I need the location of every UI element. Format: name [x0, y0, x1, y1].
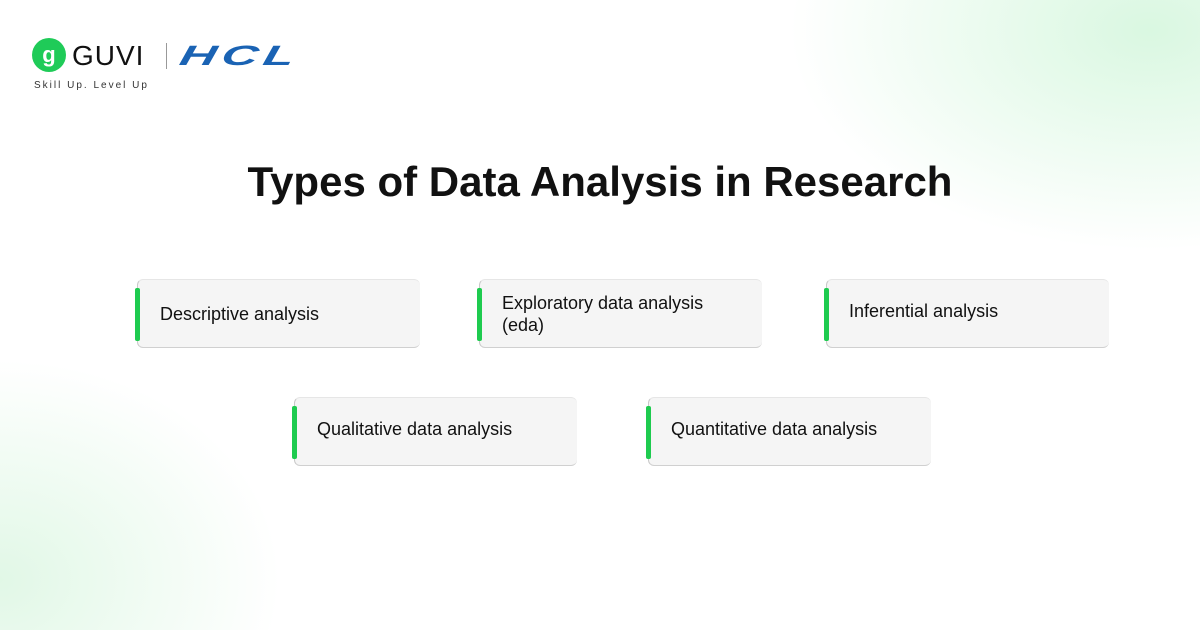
card: exploratory: (eda) [502, 314, 544, 334]
card: inferential: Inferential analysis [849, 300, 998, 320]
card: descriptive [137, 279, 420, 348]
card: qualitative: Qualitative data analysis [317, 418, 512, 438]
title: Types of Data Analysis in Research [248, 158, 952, 205]
card: quantitative: Quantitative data analysis [671, 418, 877, 438]
icon: guvi circle [32, 38, 66, 72]
tagline: Skill Up. Level Up [34, 80, 149, 91]
card: descriptive: Descriptive analysis [160, 304, 319, 324]
guvi wordmark: GUVI [72, 40, 144, 71]
card: inferential [826, 279, 1109, 348]
logo [32, 38, 303, 91]
card: quantitative [648, 397, 931, 466]
card: exploratory [479, 279, 762, 348]
card: exploratory: Exploratory data analysis [502, 292, 703, 312]
card: qualitative [294, 397, 577, 466]
icon: guvi circle: g [42, 42, 56, 67]
hcl wordmark: HCL [177, 40, 303, 71]
